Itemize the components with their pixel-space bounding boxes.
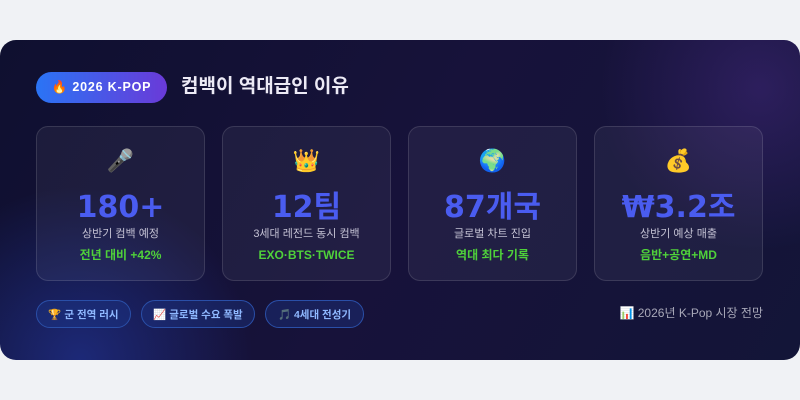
card: comebacks (36, 126, 205, 281)
chip: 4th gen: 🎵 4세대 전성기 (278, 308, 351, 320)
card: sales: 💰 (665, 148, 692, 173)
card: countries: 역대 최다 기록 (456, 248, 529, 262)
card: sales: 상반기 예상 매출 (640, 228, 717, 240)
card: legends: 👑 (293, 148, 320, 173)
chip: military: 🏆 군 전역 러시 (48, 308, 119, 320)
card: comebacks: 🎤 (107, 148, 134, 173)
card: countries: 87개국 (444, 190, 541, 225)
card: sales: 음반+공연+MD (640, 248, 717, 262)
card: legends: 3세대 레전드 동시 컴백 (253, 228, 360, 240)
card: sales: ₩3.2조 (622, 190, 735, 225)
card: countries: 글로벌 차트 진입 (454, 228, 531, 240)
chip: military (36, 300, 131, 328)
card: legends: 12팀 (272, 190, 341, 225)
chip: global demand (141, 300, 255, 328)
card: legends: EXO·BTS·TWICE (258, 248, 354, 262)
card: comebacks: 상반기 컴백 예정 (82, 228, 159, 240)
card: legends (222, 126, 391, 281)
card: countries (408, 126, 577, 281)
title: 컴백이 역대급인 이유 (181, 76, 349, 97)
chip: 4th gen (265, 300, 364, 328)
card: countries: 🌍 (479, 148, 506, 173)
card: comebacks: 전년 대비 +42% (80, 248, 161, 262)
card: sales (594, 126, 763, 281)
card: comebacks: 180+ (77, 190, 164, 225)
footer note: 📊 2026년 K-Pop 시장 전망 (619, 306, 763, 320)
badge (36, 72, 167, 103)
chip: global demand: 📈 글로벌 수요 폭발 (153, 308, 243, 320)
main panel (0, 40, 800, 360)
badge: 🔥 2026 K-POP (52, 80, 151, 94)
